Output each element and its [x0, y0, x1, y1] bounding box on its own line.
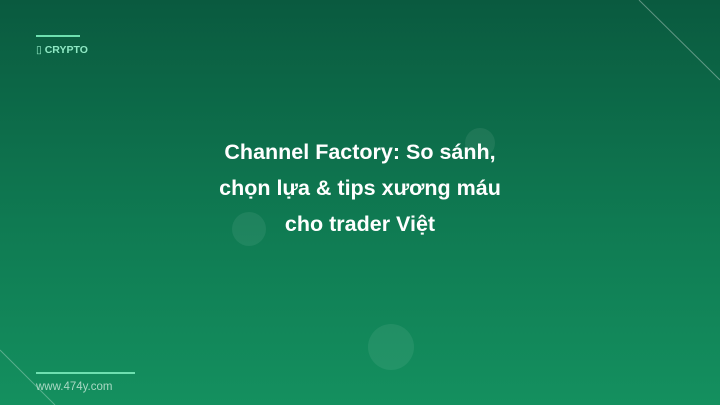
decorative circle	[232, 212, 266, 246]
footer url: www.474y.com	[36, 381, 112, 393]
title: cho trader Việt	[285, 212, 435, 236]
title	[219, 140, 501, 236]
decorative circle	[465, 128, 495, 158]
title: Channel Factory: So sánh,	[224, 140, 496, 164]
title: chọn lựa & tips xương máu	[219, 176, 501, 200]
decorative circle	[368, 324, 414, 370]
category tag: ▯ CRYPTO	[36, 44, 88, 56]
